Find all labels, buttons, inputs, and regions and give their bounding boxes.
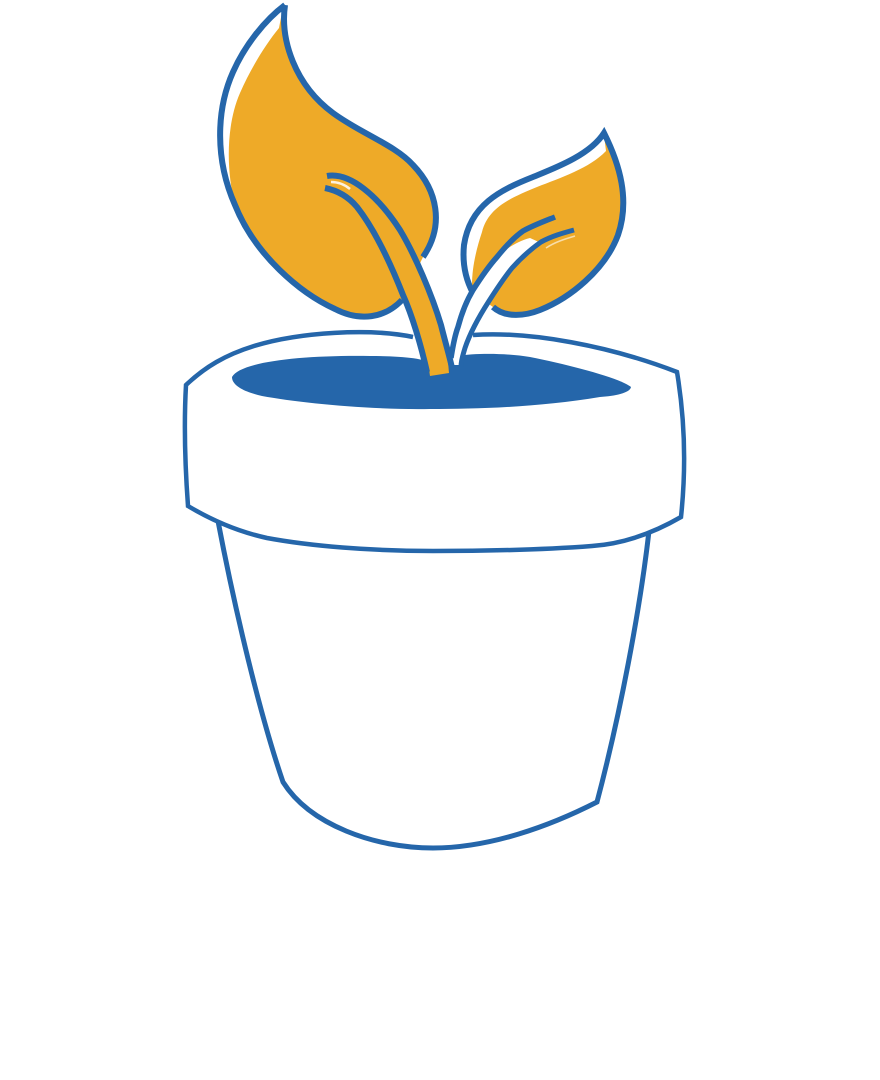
leaf outline bbox=[220, 5, 436, 317]
small right leaf bbox=[463, 133, 623, 315]
large left leaf bbox=[220, 5, 436, 317]
soil bbox=[232, 354, 631, 409]
leaf outline bbox=[463, 133, 623, 315]
small leaf stem bbox=[451, 217, 575, 367]
leaf highlight bbox=[220, 7, 283, 205]
large leaf stem bbox=[325, 176, 452, 376]
pot body bbox=[218, 521, 649, 848]
leaf highlight bbox=[463, 135, 606, 285]
stem tip highlight bbox=[546, 236, 575, 248]
pot rim bbox=[185, 332, 684, 551]
stem tip highlight bbox=[331, 182, 350, 189]
